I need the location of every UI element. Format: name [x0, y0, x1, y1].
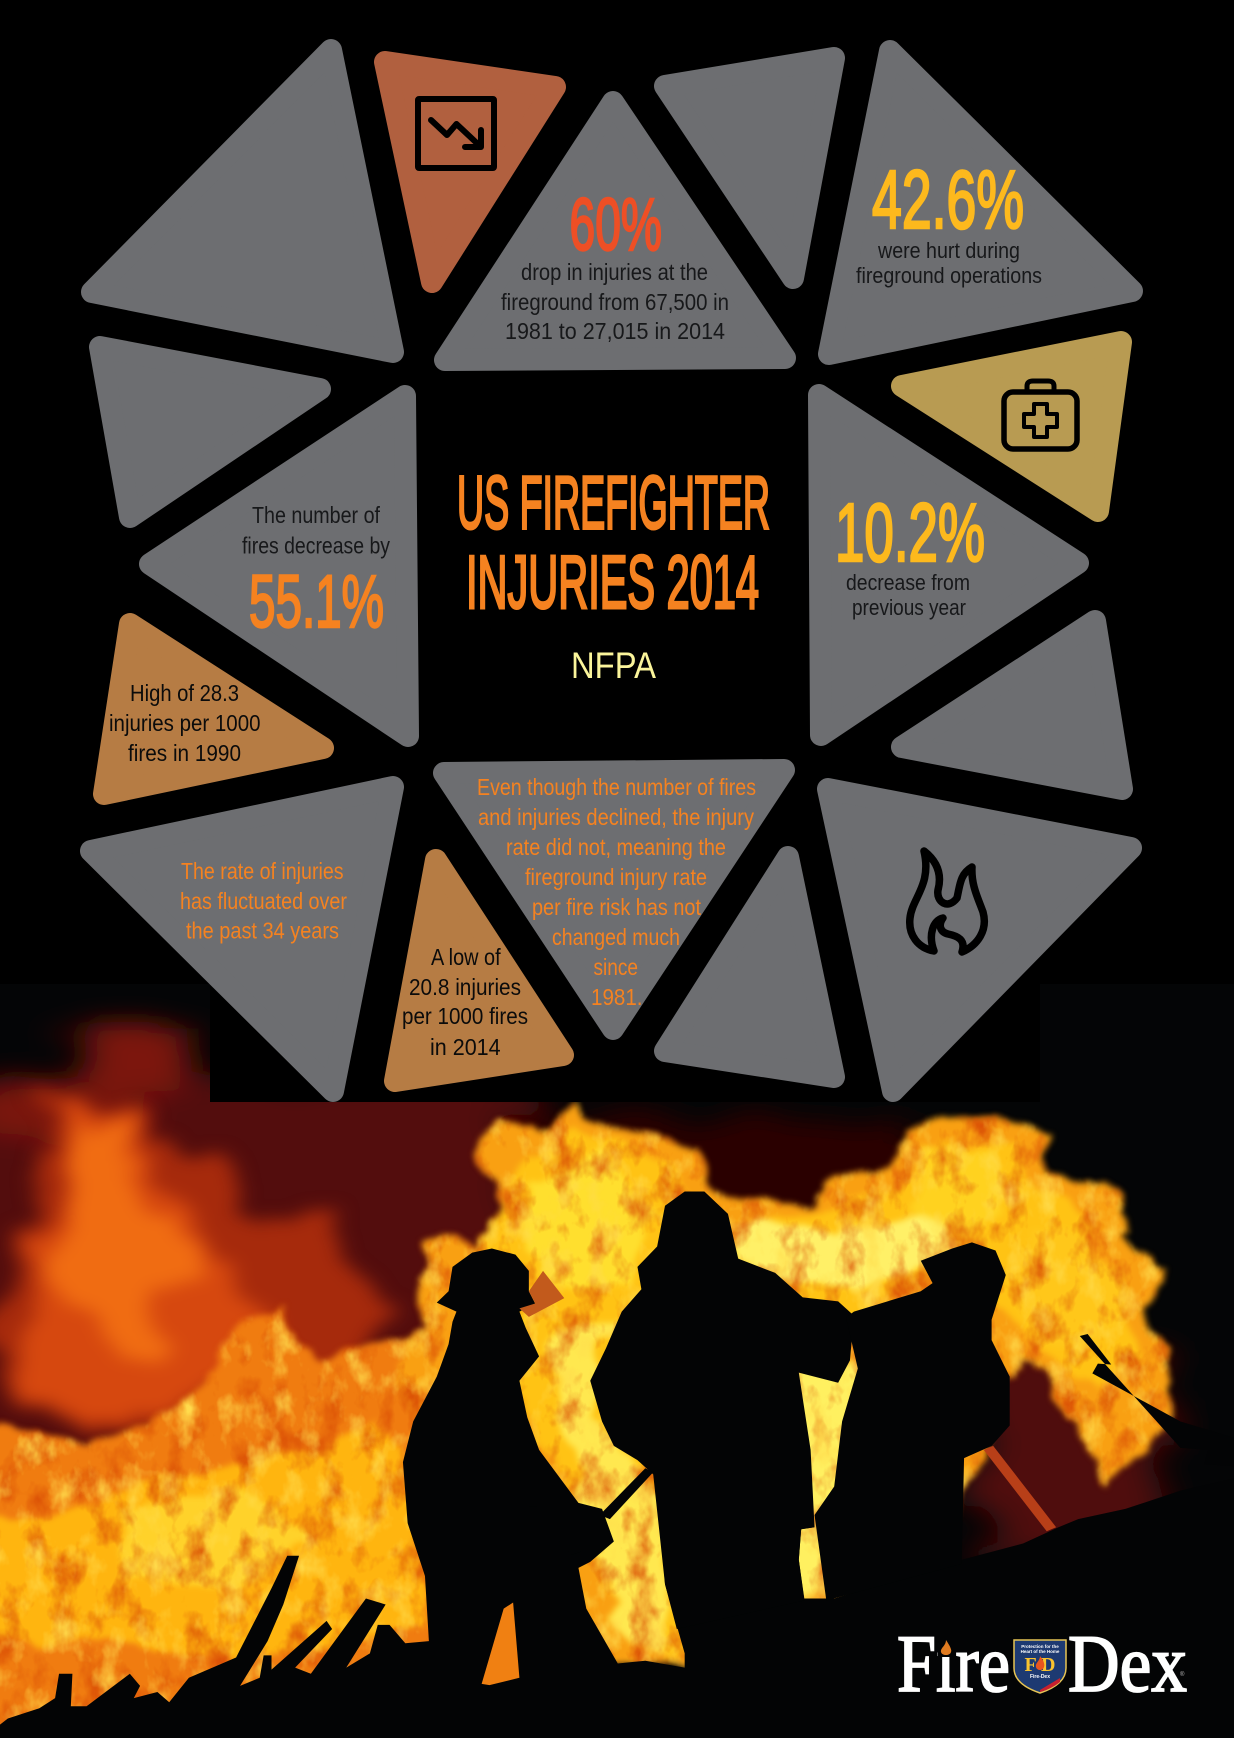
text: fireground operations: were hurt during — [877, 238, 1020, 263]
wordmark: Fire: Fire — [897, 1618, 1010, 1709]
text: rate fluctuated: The rate of injuries — [181, 858, 344, 884]
right firefighter — [815, 1242, 1010, 1600]
text: low of 20.8 — [402, 944, 528, 1060]
icon: medical kit — [1004, 381, 1077, 449]
hose handle — [600, 1468, 653, 1519]
panel: 55.1% — [150, 396, 408, 736]
icon: shield — [1014, 1640, 1066, 1693]
text: number of fires: fires decrease by — [242, 532, 390, 558]
text: explanation — [477, 774, 756, 1010]
text: explanation: fireground injury rate — [525, 864, 707, 890]
panel: blank grey triangle bottom — [665, 857, 834, 1077]
registered mark: ® — [1180, 1671, 1185, 1678]
icon: shield: Fire-Dex — [1030, 1674, 1050, 1680]
icon: i flame — [938, 1634, 956, 1657]
panel: injury rate explanation — [444, 770, 784, 1029]
text: decrease from previous year: previous year — [852, 595, 966, 620]
panel: blank grey triangle top left — [92, 50, 393, 352]
text: number of fires: The number of — [252, 502, 381, 528]
panel: 60% drop — [445, 102, 785, 360]
black panel extension over photo — [210, 984, 1040, 1102]
text: drop description: 1981 to 27,015 in 2014 — [505, 318, 725, 344]
text: rate fluctuated: has fluctuated over — [180, 888, 347, 914]
title: INJURIES 2014 — [466, 540, 759, 624]
panel: blank grey triangle top — [665, 58, 834, 278]
text: explanation: changed much — [552, 924, 680, 950]
panel: 10.2% — [819, 395, 1078, 735]
text: fireground operations — [856, 238, 1042, 288]
logo: Fire-Dex — [897, 1618, 1187, 1709]
icon: declining chart — [418, 99, 494, 168]
ground, rubble and left firefighter — [0, 1249, 1234, 1738]
black header panel — [0, 0, 1234, 984]
text: high of 28.3: injuries per 1000 — [109, 710, 260, 736]
right beam — [1080, 1334, 1234, 1466]
text: explanation: since — [594, 954, 638, 980]
panel: blank grey triangle left — [100, 347, 320, 517]
glowing pole — [984, 1446, 1056, 1531]
text: explanation: rate did not, meaning the — [506, 834, 726, 860]
text: drop description: drop in injuries at the — [521, 259, 708, 285]
text: low of 20.8: A low of — [431, 944, 501, 970]
fire photograph background — [0, 984, 1234, 1738]
firefighter silhouettes and rubble — [0, 1192, 1234, 1738]
panel: low of 20.8 — [395, 860, 563, 1081]
panel: rate fluctuated — [91, 787, 393, 1091]
icon: shield: Protection for the — [1021, 1644, 1059, 1649]
text: low of 20.8: in 2014 — [430, 1034, 501, 1060]
panel: blank grey triangle right — [902, 621, 1122, 789]
panel: 42.6% — [829, 51, 1132, 354]
panel: flame triangle — [828, 789, 1131, 1091]
text: high of 28.3 — [109, 680, 260, 766]
text: high of 28.3: fires in 1990 — [128, 740, 241, 766]
text: low of 20.8: 20.8 injuries — [409, 974, 521, 1000]
text: explanation: per fire risk has not — [532, 894, 702, 920]
text: drop description: fireground from 67,500 in — [501, 289, 729, 315]
text: rate fluctuated: the past 34 years — [186, 918, 339, 944]
text: decrease from previous year: decrease from — [846, 570, 970, 595]
stat: 55.1%: 55.1% — [249, 560, 384, 643]
text: rate fluctuated — [180, 858, 347, 944]
source: NFPA: NFPA — [571, 645, 656, 686]
text: explanation: 1981. — [591, 984, 642, 1010]
icon: shield: Heart of the Home — [1021, 1649, 1060, 1654]
centre firefighter — [590, 1192, 854, 1629]
flames — [0, 1019, 1180, 1738]
stat: 10.2%: 10.2% — [835, 486, 985, 579]
text: high of 28.3: High of 28.3 — [130, 680, 239, 706]
text: drop description — [501, 259, 729, 344]
text: explanation: Even though the number of fires — [477, 774, 756, 800]
icon: shield: F D — [1025, 1654, 1055, 1676]
text: number of fires — [242, 502, 390, 558]
panel: declining chart triangle — [385, 62, 555, 282]
wordmark: Dex: Dex — [1068, 1618, 1187, 1709]
panel: medical kit triangle — [902, 342, 1121, 511]
title — [457, 461, 770, 624]
stat: 60%: 60% — [570, 183, 662, 266]
leg gap — [482, 1603, 519, 1685]
icon: flame — [910, 851, 984, 952]
stat: 42.6%: 42.6% — [872, 153, 1024, 246]
title: US FIREFIGHTER — [457, 461, 770, 545]
text: explanation: and injuries declined, the injury — [478, 804, 754, 830]
text: low of 20.8: per 1000 fires — [402, 1003, 528, 1029]
panel: high of 28.3 — [104, 624, 323, 794]
text: decrease from previous year — [846, 570, 970, 620]
text: fireground operations: fireground operations — [856, 263, 1042, 288]
axe blade — [519, 1271, 564, 1317]
